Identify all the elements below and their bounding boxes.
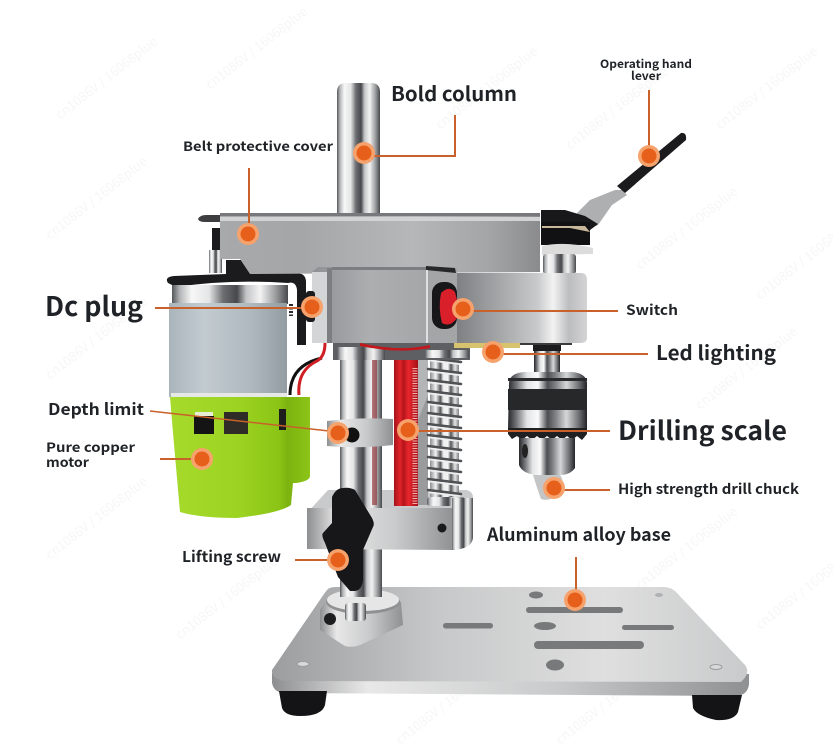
callout: operating hand lever xyxy=(600,56,692,167)
motor with housing xyxy=(167,228,325,518)
watermark: cn1086V / 16068plue xyxy=(41,291,151,383)
marker xyxy=(191,448,213,470)
marker xyxy=(543,477,565,499)
carriage block front xyxy=(307,498,473,550)
label: Operating hand xyxy=(600,56,692,72)
marker xyxy=(452,298,474,320)
watermark: cn1086V / 16068plue xyxy=(551,656,661,747)
leader line xyxy=(364,115,455,156)
label: Pure copper xyxy=(46,437,135,456)
watermark: cn1086V / 16068plue xyxy=(561,61,671,153)
watermark: cn1086V / 16068plue xyxy=(51,31,161,123)
leader line xyxy=(575,557,577,600)
lower column xyxy=(340,345,382,597)
label: Bold column xyxy=(391,78,517,107)
callout: high strength drill chuck xyxy=(543,477,800,499)
marker xyxy=(327,549,349,571)
leader line xyxy=(150,411,338,432)
red scale bar xyxy=(394,349,428,506)
watermark: cn1086V / 16068plue xyxy=(631,181,741,273)
dc plug socket xyxy=(306,291,315,322)
label: Dc plug xyxy=(45,285,143,324)
callout: aluminum alloy base xyxy=(486,521,671,611)
callout: drilling scale xyxy=(397,411,787,448)
callout: pure copper motor: motor xyxy=(46,452,89,471)
drive wheel and lever xyxy=(541,133,686,274)
marker xyxy=(482,341,504,363)
top bracket under head xyxy=(333,343,470,360)
callout: lifting screw xyxy=(182,546,349,571)
motor wires xyxy=(290,358,322,395)
leader line xyxy=(155,307,312,309)
lifting handle knob xyxy=(322,488,374,591)
upper column xyxy=(337,83,380,213)
spring xyxy=(427,350,465,506)
callout: bold column xyxy=(353,78,517,164)
leader line xyxy=(463,310,618,312)
housing vents xyxy=(194,416,214,434)
drill chuck xyxy=(508,345,587,500)
leader line xyxy=(554,489,610,491)
marker xyxy=(638,145,660,167)
label: Belt protective cover xyxy=(183,136,333,155)
watermark: cn1086V / 16068plue xyxy=(41,471,151,563)
base plate xyxy=(272,587,749,720)
watermark: cn1086V / 16068plue xyxy=(631,501,741,593)
rocker switch xyxy=(432,282,457,329)
leader line xyxy=(248,168,250,234)
leader line xyxy=(295,559,338,561)
label: High strength drill chuck xyxy=(618,479,800,499)
belt cover xyxy=(198,213,540,274)
head box xyxy=(306,266,587,343)
label: Led lighting xyxy=(656,337,776,366)
callout: belt protective cover xyxy=(183,136,333,245)
callout: led lighting xyxy=(482,337,776,366)
watermark: cn1086V / 16068plue xyxy=(391,656,501,747)
callout: operating hand lever: lever xyxy=(631,68,662,84)
marker xyxy=(397,419,419,441)
label: Lifting screw xyxy=(182,546,281,567)
callout: switch xyxy=(452,298,678,320)
wire spring xyxy=(289,304,293,316)
led strip xyxy=(454,343,520,348)
label: Drilling scale xyxy=(618,411,787,448)
watermark: cn1086V / 16068plue xyxy=(711,41,821,133)
watermark: cn1086V / 16068plue xyxy=(201,1,311,93)
drill press machine xyxy=(167,83,749,720)
marker xyxy=(301,296,323,318)
base slots xyxy=(443,592,674,670)
carriage top surface xyxy=(307,490,473,515)
callout: dc plug xyxy=(45,285,323,324)
label: Switch xyxy=(626,300,678,320)
watermark: cn1086V / 16068plue xyxy=(431,41,541,133)
marker xyxy=(237,223,259,245)
depth limit collar xyxy=(327,418,393,447)
column collar on base xyxy=(320,589,403,647)
leader line xyxy=(493,353,648,355)
label: Depth limit xyxy=(48,396,144,420)
leader line xyxy=(648,90,650,156)
marker xyxy=(564,589,586,611)
leader line xyxy=(408,430,610,432)
marker xyxy=(353,142,375,164)
callout: pure copper motor xyxy=(46,437,213,471)
watermark: cn1086V / 16068plue xyxy=(691,321,801,413)
leader line xyxy=(160,458,202,460)
watermark: cn1086V / 16068plue xyxy=(171,551,281,643)
marker xyxy=(327,422,349,444)
label: Aluminum alloy base xyxy=(486,521,671,547)
callout: depth limit xyxy=(48,396,349,444)
watermark: cn1086V / 16068plue xyxy=(41,151,151,243)
